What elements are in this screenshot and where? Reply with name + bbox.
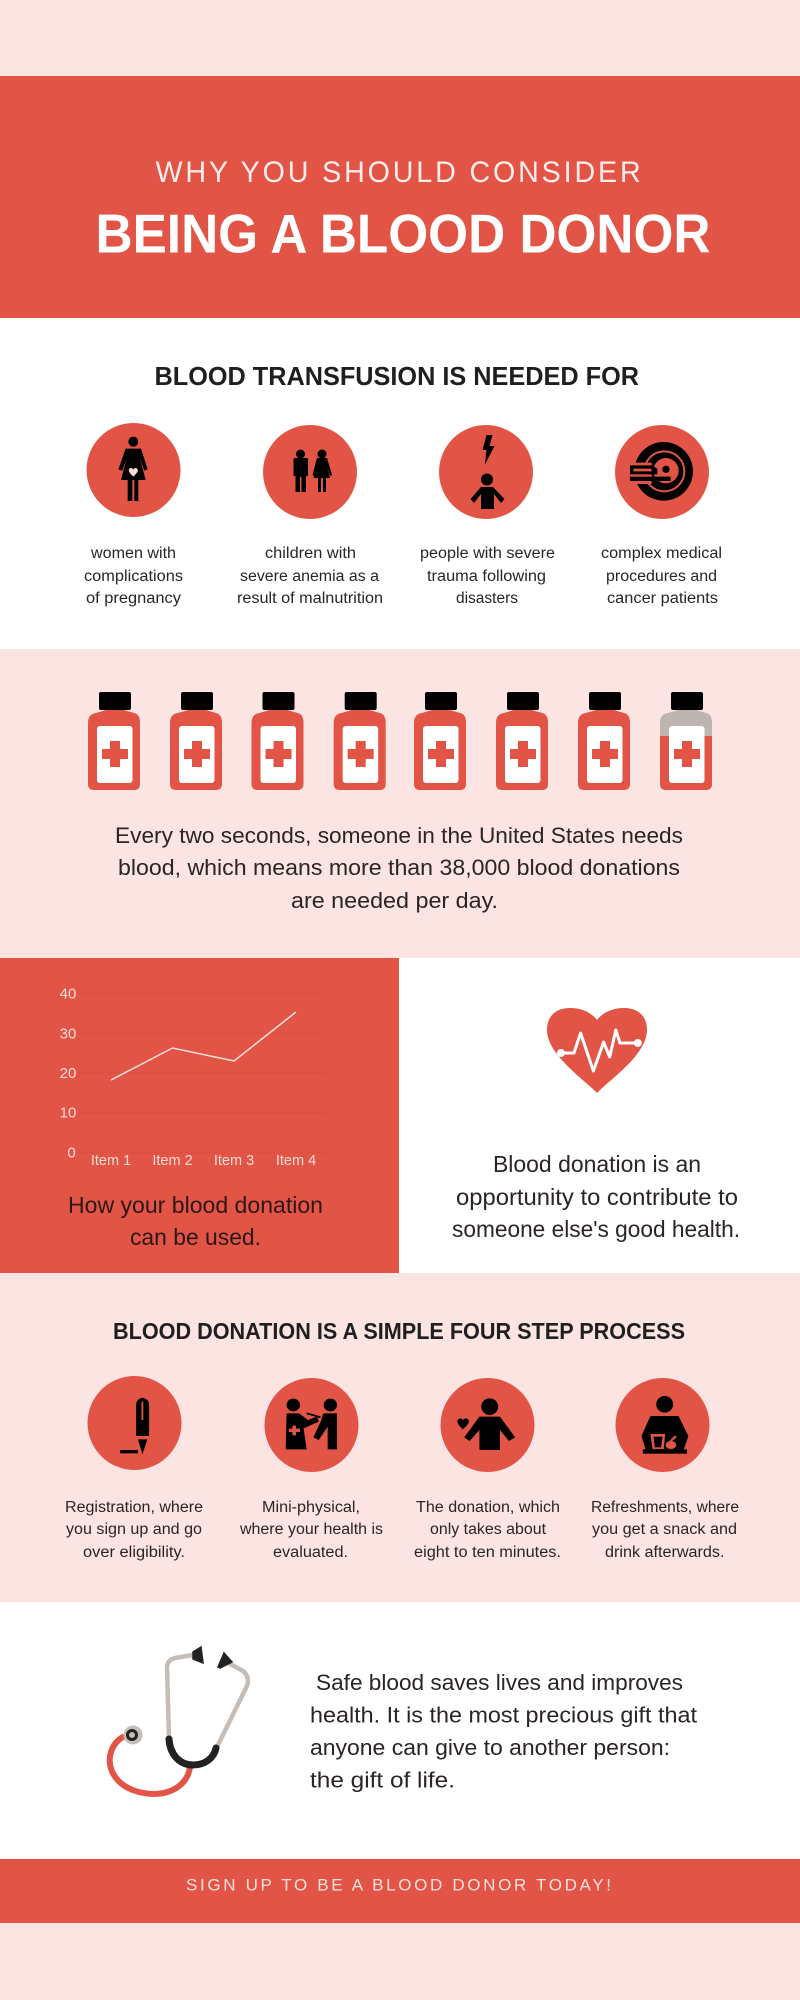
- text: every two seconds statistic: Every two seconds, someone in the United States needs: [115, 823, 683, 848]
- line chart: blood donation use: [60, 986, 327, 1169]
- icon: mini-physical doctor and patient: [264, 1378, 358, 1472]
- line chart: blood donation use: Item 4: [276, 1153, 316, 1169]
- icon: two children: [263, 425, 357, 519]
- text: mini-physical: Mini-physical,: [262, 1499, 360, 1516]
- text: the donation: [414, 1499, 561, 1561]
- text: registration: you sign up and go: [66, 1521, 202, 1538]
- panel: call to action banner: [0, 1859, 800, 1923]
- text: registration: over eligibility.: [83, 1544, 185, 1561]
- icon row: eight blood bottles: [88, 692, 712, 790]
- panel: transfusion needs: [0, 318, 800, 649]
- icon: stethoscope: [110, 1647, 248, 1794]
- text: safe blood saves lives: Safe blood saves lives and improves: [316, 1670, 683, 1695]
- text: children with severe anemia: children with: [265, 545, 356, 562]
- heading: four step process: BLOOD DONATION IS A SIMPLE FOUR STEP PROCESS: [113, 1318, 685, 1344]
- panel: header banner: [0, 76, 800, 318]
- text: opportunity to contribute: someone else's good health.: [452, 1216, 740, 1242]
- text: complex medical procedures: complex medical: [601, 545, 722, 562]
- text: the donation: The donation, which: [416, 1499, 560, 1516]
- text: children with severe anemia: [237, 545, 383, 607]
- icon: MRI scanner: [615, 425, 709, 519]
- line chart: blood donation use: 0: [67, 1144, 76, 1162]
- text: mini-physical: evaluated.: [273, 1544, 348, 1561]
- text: complex medical procedures: procedures and: [606, 568, 717, 585]
- text: women with complications: [84, 545, 183, 607]
- line chart: blood donation use: 20: [60, 1065, 76, 1082]
- text: women with complications: women with: [90, 545, 176, 562]
- text: refreshments: Refreshments, where: [591, 1499, 739, 1516]
- text: opportunity to contribute: [452, 1151, 740, 1242]
- icon: donor with heart: [440, 1378, 534, 1472]
- line chart: blood donation use: Item 3: [214, 1153, 254, 1169]
- icon: heart with pulse: [547, 1008, 647, 1093]
- text: refreshments: [591, 1499, 739, 1561]
- line chart: blood donation use: 40: [60, 986, 76, 1002]
- title: kicker: WHY YOU SHOULD CONSIDER: [156, 156, 644, 189]
- line chart: blood donation use: Item 2: [152, 1153, 193, 1169]
- icon: registration pen: [88, 1376, 182, 1470]
- text: people with severe trauma: [420, 545, 555, 607]
- text: women with complications: complications: [84, 568, 183, 585]
- text: registration: [65, 1499, 203, 1561]
- text: every two seconds statistic: [115, 823, 683, 913]
- text: chart caption: [68, 1192, 323, 1250]
- text: safe blood saves lives: anyone can give to another person:: [310, 1735, 670, 1760]
- text: people with severe trauma: trauma following: [427, 568, 546, 585]
- text: refreshments: drink afterwards.: [605, 1544, 724, 1561]
- text: children with severe anemia: severe anemia as a: [240, 568, 379, 585]
- text: safe blood saves lives: [310, 1670, 697, 1793]
- text: every two seconds statistic: are needed per day.: [291, 888, 498, 913]
- text: registration: Registration, where: [65, 1499, 203, 1516]
- text: mini-physical: [239, 1499, 383, 1561]
- title: main heading: BEING A BLOOD DONOR: [96, 202, 710, 264]
- icon: pregnant woman: [86, 423, 180, 517]
- icon: refreshments: [616, 1378, 710, 1472]
- text: every two seconds statistic: blood, which means more than 38,000 blood donations: [118, 855, 680, 880]
- panel: line chart: [0, 958, 399, 1273]
- text: opportunity to contribute: opportunity to contribute to: [456, 1184, 738, 1210]
- text: safe blood saves lives: health. It is the most precious gift that: [310, 1703, 697, 1728]
- text: people with severe trauma: disasters: [456, 590, 518, 607]
- text: opportunity to contribute: Blood donation is an: [493, 1151, 701, 1177]
- text: children with severe anemia: result of malnutrition: [237, 590, 383, 607]
- line chart: blood donation use: Item 1: [91, 1153, 131, 1169]
- text: chart caption: can be used.: [130, 1224, 261, 1250]
- text: people with severe trauma: people with severe: [420, 545, 555, 562]
- text: sign up call to action: SIGN UP TO BE A BLOOD DONOR TODAY!: [186, 1876, 615, 1894]
- text: the donation: only takes about: [430, 1521, 547, 1538]
- line chart: blood donation use: 30: [60, 1026, 76, 1042]
- heading: blood transfusion is needed for: BLOOD TRANSFUSION IS NEEDED FOR: [154, 361, 639, 391]
- icon: person struck by lightning: [439, 425, 533, 519]
- text: mini-physical: where your health is: [239, 1521, 383, 1538]
- panel: safe blood message: [0, 1602, 800, 1859]
- text: complex medical procedures: [601, 545, 722, 607]
- panel: heart message: [399, 958, 800, 1273]
- text: safe blood saves lives: the gift of life.: [310, 1768, 455, 1793]
- line chart: blood donation use: 10: [60, 1104, 76, 1122]
- text: refreshments: you get a snack and: [592, 1521, 737, 1538]
- text: women with complications: of pregnancy: [86, 590, 181, 607]
- text: complex medical procedures: cancer patients: [607, 590, 718, 607]
- text: chart caption: How your blood donation: [68, 1192, 323, 1218]
- panel: four step process: [0, 1273, 800, 1602]
- panel: blood bottles statistic: [0, 649, 800, 958]
- text: the donation: eight to ten minutes.: [414, 1544, 561, 1561]
